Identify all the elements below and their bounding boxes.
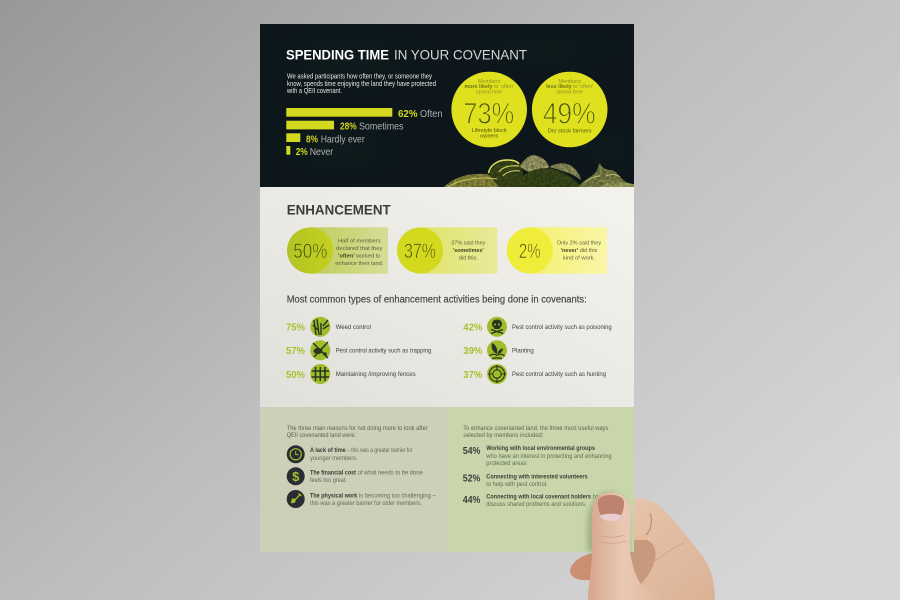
activity: planting — [463, 340, 534, 360]
way: local covenant holders: to — [593, 494, 599, 501]
intro text: with a QEII covenant. — [286, 86, 342, 95]
stat card: 37%: did this. — [459, 255, 478, 261]
bar chart: how often: Sometimes — [359, 122, 404, 133]
activity: trapping — [286, 340, 431, 360]
way: environmental groups: who have an interest in protecting and enhancing — [485, 453, 612, 460]
bar chart: how often: 62% — [398, 109, 418, 120]
way: local covenant holders: discuss shared problems and solutions. — [486, 501, 587, 508]
reasons intro — [287, 425, 428, 439]
stat card: 50%: declared that they — [336, 246, 382, 252]
icon: dollar: $ — [292, 469, 300, 484]
circle: lifestyle block owners 73%: more likely to 'often' — [464, 84, 514, 90]
stat card: 37%: 37% — [404, 240, 436, 263]
way: local covenant holders: 44% — [463, 495, 480, 506]
poster — [250, 20, 645, 552]
icon: weed — [310, 317, 330, 337]
thumbnail — [598, 495, 624, 521]
reasons intro: QEII covenanted land were: — [287, 432, 356, 439]
circle: dry stock farmers 49% — [532, 72, 608, 147]
way: local covenant holders: Connecting with local covenant holders — [486, 494, 591, 501]
bar chart: how often: Often — [420, 109, 442, 120]
stat card: 2%: kind of work. — [563, 255, 595, 261]
stat card: 2%: 2% — [519, 240, 541, 263]
way: interested volunteers: to help with pest control. — [486, 481, 548, 488]
panel: enhancement — [260, 187, 634, 407]
circle: dry stock farmers 49%: less likely to 'often' — [546, 84, 593, 90]
reason: lack of time: A lack of time — [310, 447, 346, 454]
useful ways intro: selected by members included: — [463, 432, 544, 439]
reason: lack of time — [287, 445, 412, 463]
circle: lifestyle block owners 73%: Members — [478, 79, 501, 85]
activity: planting: 39% — [463, 345, 483, 357]
bar chart: how often — [286, 108, 442, 158]
bar chart: how often: 8% — [306, 134, 318, 145]
stat card: 37%: 'sometimes' — [453, 248, 484, 254]
fern foliage photo — [443, 155, 634, 188]
title: SPENDING TIME — [286, 46, 389, 62]
intro text: know, spends time enjoying the land they have protected — [287, 79, 436, 88]
reasons intro: The three main reasons for not doing more to look after — [287, 425, 428, 432]
reason: financial cost: feels too great. — [310, 477, 347, 484]
activity: hunting — [463, 364, 606, 384]
title: IN YOUR COVENANT — [394, 46, 527, 62]
way: interested volunteers: Connecting with interested volunteers — [486, 473, 588, 480]
icon: plant — [487, 340, 507, 360]
activity: weed control: Weed control — [336, 324, 371, 331]
bar chart: how often: 2% — [296, 147, 308, 158]
activity: fences: 50% — [286, 369, 306, 381]
activity: weed control: 75% — [286, 322, 306, 334]
circle: dry stock farmers 49%: Members — [558, 79, 581, 85]
panel: reasons — [260, 407, 447, 552]
way: interested volunteers — [463, 473, 588, 488]
reason: physical work — [287, 490, 436, 508]
subheading: activities: Most common types of enhancement activities being done in covenants: — [287, 294, 587, 306]
reason: physical work: The physical work — [310, 492, 358, 499]
activity: weed control — [286, 317, 371, 337]
way: environmental groups: protected areas — [486, 460, 527, 467]
circle: lifestyle block owners 73%: 73% — [463, 97, 514, 130]
way: local covenant holders — [463, 494, 599, 508]
way: environmental groups — [463, 445, 612, 467]
activity: hunting: 37% — [463, 369, 483, 381]
stat card: 37% — [397, 227, 497, 274]
icon: target — [487, 364, 507, 384]
reason: financial cost: The financial cost — [310, 470, 357, 477]
hand: thumb over poster — [588, 492, 665, 600]
circle: dry stock farmers 49%: spend time — [557, 89, 583, 95]
useful ways intro — [463, 425, 608, 439]
stat card: 50%: 50% — [293, 240, 327, 263]
reason: lack of time: – this was a greater barrier for — [347, 447, 412, 454]
intro text — [286, 72, 436, 95]
stat card: 2% — [507, 227, 607, 274]
reason: lack of time: younger members. — [310, 455, 358, 462]
panel: header — [250, 20, 645, 188]
reason: physical work: this was a greater barrier for older members. — [310, 500, 422, 507]
circle: lifestyle block owners 73%: spend time — [476, 89, 502, 95]
stat card: 50%: enhance their land. — [335, 261, 384, 267]
stat card: 50% — [287, 227, 388, 274]
icon: clock — [287, 445, 305, 463]
bar chart: how often: Never — [310, 147, 334, 158]
intro text: We asked participants how often they, or someone they — [287, 72, 432, 80]
circle: lifestyle block owners 73%: Lifestyle block — [472, 128, 507, 134]
activity: hunting: Pest control activity such as hunting — [512, 371, 606, 378]
title — [286, 46, 527, 62]
stat card: 50%: 'often' worked to — [338, 253, 381, 259]
heading: enhancement: ENHANCEMENT — [287, 202, 391, 218]
way: environmental groups: 54% — [463, 446, 480, 457]
reason: financial cost: of what needs to be done — [358, 470, 423, 477]
activity: poisoning: 42% — [463, 322, 483, 334]
reason: physical work: is becoming too challenging – — [359, 492, 436, 499]
activity: fences — [286, 364, 416, 384]
stat card: 2%: Only 2% said they — [557, 241, 601, 247]
bar chart: how often: Hardly ever — [321, 134, 365, 145]
stat card: 50%: Half of members — [338, 238, 381, 244]
panel: useful ways — [447, 407, 634, 552]
useful ways intro: To enhance covenanted land, the three most useful ways — [463, 425, 608, 432]
activity: fences: Maintaining /improving fences — [336, 371, 416, 378]
circle: dry stock farmers 49%: Dry stock farmers — [548, 129, 592, 135]
stat card: 37%: 37% said they — [451, 241, 485, 247]
way: environmental groups: Working with local environmental groups — [486, 445, 595, 452]
circle: dry stock farmers 49%: 49% — [543, 97, 596, 130]
activity: planting: Planting — [512, 348, 534, 354]
reason: financial cost — [287, 467, 423, 485]
icon: spade — [287, 490, 305, 508]
icon: trap — [310, 340, 330, 360]
bar chart: how often: 28% — [340, 122, 357, 133]
activity: trapping: Pest control activity such as trapping — [336, 348, 431, 354]
stat card: 2%: 'never' did this — [561, 248, 597, 254]
activity: trapping: 57% — [286, 345, 306, 357]
circle: lifestyle block owners 73%: owners — [480, 134, 498, 140]
hand: back of hand behind poster — [570, 499, 715, 600]
icon: fence — [310, 364, 330, 384]
way: interested volunteers: 52% — [463, 473, 480, 484]
activity: poisoning — [463, 317, 612, 337]
circle: lifestyle block owners 73% — [451, 72, 527, 147]
activity: poisoning: Pest control activity such as poisoning — [512, 324, 612, 331]
icon: skull and crossbones — [487, 317, 507, 337]
